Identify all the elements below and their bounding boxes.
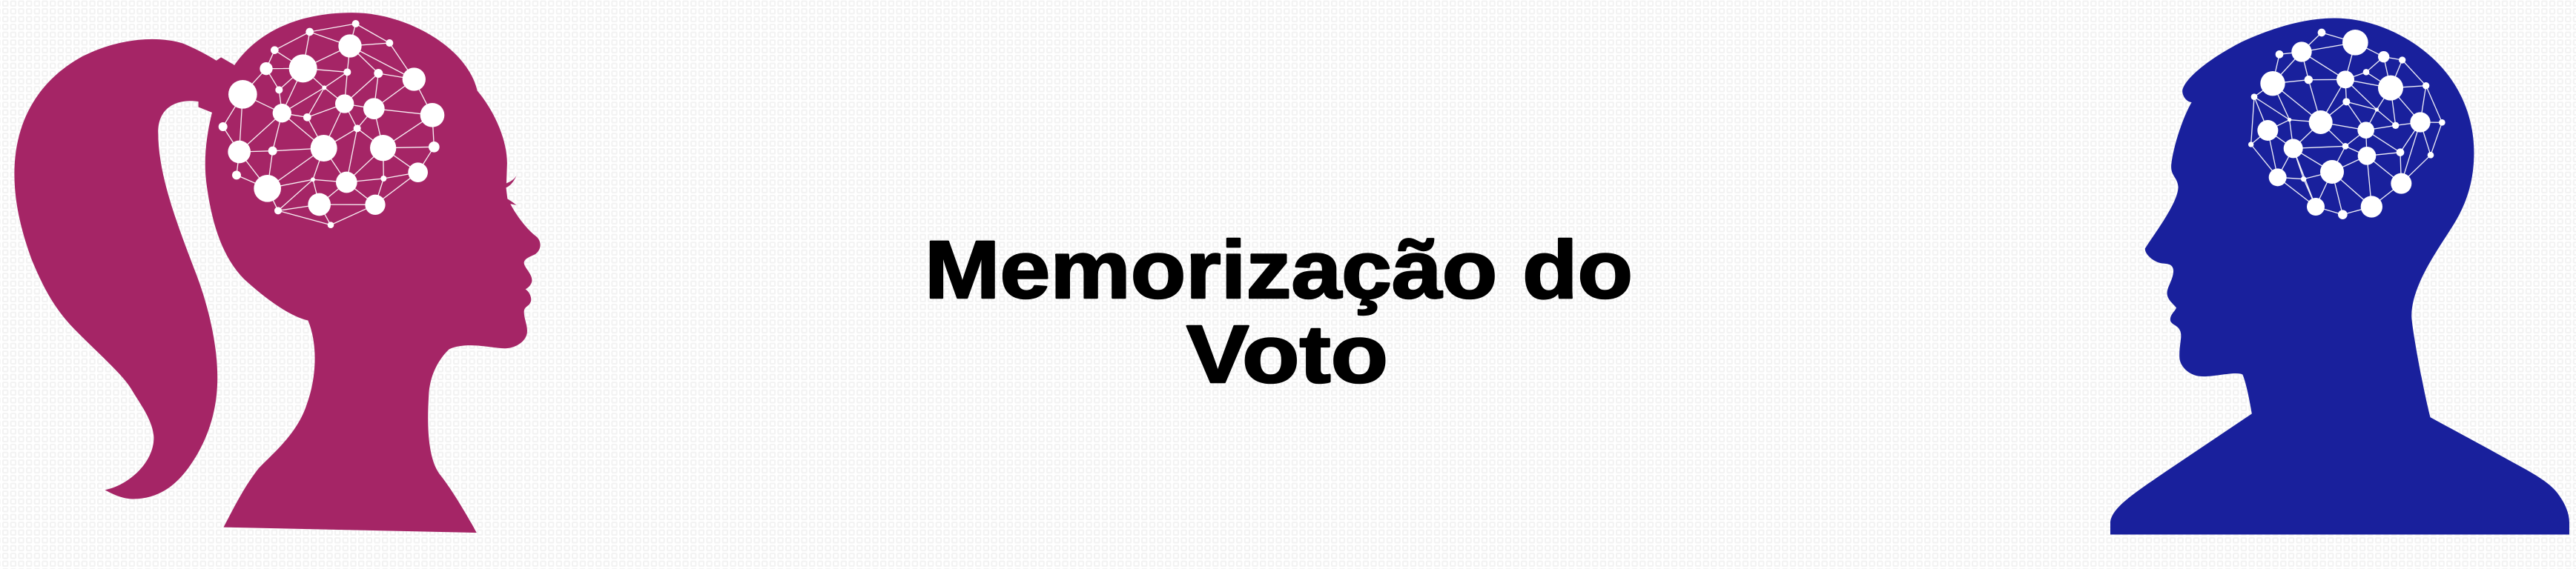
title: Voto	[1186, 309, 1388, 400]
brain network: woman	[219, 20, 444, 228]
icon: man head silhouette with brain network	[2110, 18, 2569, 534]
woman silhouette with ponytail	[14, 13, 541, 533]
title	[925, 224, 1633, 400]
icon: woman head silhouette with brain network	[14, 13, 541, 533]
brain network: man	[2248, 29, 2445, 219]
man silhouette	[2110, 18, 2569, 534]
title: Memorização do	[925, 224, 1633, 316]
